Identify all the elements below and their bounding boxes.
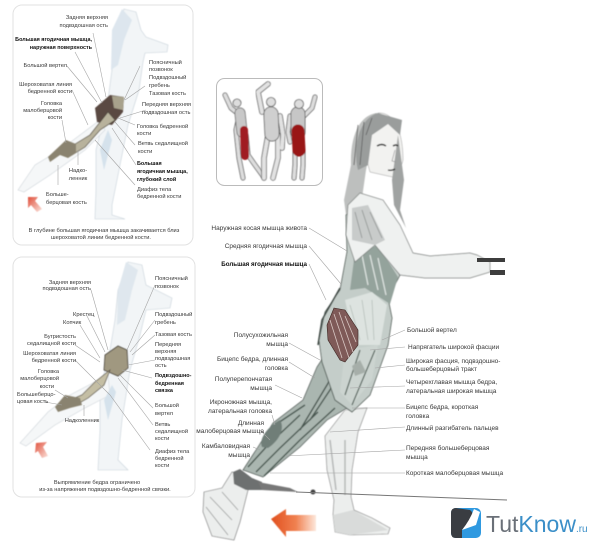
main figure bbox=[203, 113, 507, 540]
icon bbox=[451, 508, 481, 538]
cable bar handle bbox=[477, 258, 505, 275]
figure: left bbox=[225, 95, 263, 178]
torso and thigh bbox=[318, 200, 400, 412]
main figure labels: left: малоберцовая мышца bbox=[196, 427, 264, 435]
panel 2 labels: бедренная bbox=[155, 380, 184, 387]
panel 2 labels: цовая кость bbox=[17, 399, 48, 405]
panel 2 labels: ость bbox=[155, 363, 167, 369]
panel 2 labels: Бугристость bbox=[44, 334, 76, 340]
panel 2 labels: Головка bbox=[38, 369, 60, 375]
panel 2 labels: кости bbox=[40, 384, 54, 390]
panel 1 labels: Больше- bbox=[46, 192, 69, 198]
panel 2 labels: связка bbox=[155, 388, 174, 394]
main figure labels: left: Полуперепончатая bbox=[215, 376, 272, 383]
figure: centre bbox=[258, 84, 283, 178]
panel 2 labels: Передняя bbox=[155, 342, 181, 348]
panel 2 labels: подвздошная bbox=[155, 356, 190, 362]
panel 1 labels: наружная поверхность bbox=[30, 45, 93, 51]
main leader lines bbox=[253, 228, 405, 473]
panel 2 labels: Тазовая кость bbox=[155, 332, 192, 338]
panel 2 labels: кости bbox=[155, 463, 169, 469]
panel 2 labels: верхняя bbox=[155, 349, 176, 355]
panel 1 labels: позвонок bbox=[149, 67, 173, 73]
main figure labels: right: Передняя большеберцовая bbox=[406, 444, 490, 452]
red arrow bbox=[35, 442, 48, 458]
panel 1 labels: Задняя верхняя bbox=[66, 15, 108, 21]
panel 2 labels: Подвздошно- bbox=[155, 373, 192, 379]
panel 2 labels bbox=[17, 275, 192, 493]
arm and shoulder bbox=[346, 193, 490, 278]
panel 1 labels bbox=[15, 15, 191, 241]
main figure labels: right: Напрягатель широкой фасции bbox=[408, 343, 499, 351]
panel 1 labels: гребень bbox=[149, 83, 170, 89]
panel 1 labels: Подвздошный bbox=[149, 74, 186, 81]
panel 2 labels: седалищной кости bbox=[27, 340, 76, 347]
main figure labels: right: большеберцовый тракт bbox=[406, 365, 477, 373]
panel 1 labels: берцовая кость bbox=[46, 200, 87, 206]
main figure labels: left: мышца bbox=[228, 452, 250, 459]
main figure labels: left: Камбаловидная bbox=[202, 442, 250, 450]
panel 2 labels: гребень bbox=[155, 320, 176, 326]
panel 2 labels: бедренной bbox=[155, 455, 184, 462]
pelvis and femur bbox=[55, 346, 128, 412]
main figure labels: left: Длинная bbox=[238, 420, 264, 427]
main figure labels: right bbox=[406, 326, 504, 477]
panel 1 labels: Поясничный bbox=[149, 59, 182, 66]
panel 1 labels: ягодичная мышца, bbox=[137, 169, 188, 175]
panel 2 labels: Шероховатая линия bbox=[23, 351, 76, 357]
panel 1 labels: Диафиз тела bbox=[137, 187, 172, 193]
panel 1 labels: Ветвь седалищной bbox=[138, 140, 188, 147]
panel 2 labels: подвздошная ость bbox=[43, 286, 91, 292]
panel 2 labels: вертел bbox=[155, 411, 173, 417]
head bbox=[354, 113, 406, 228]
main figure labels: left bbox=[196, 225, 308, 459]
panel 1 labels: Передняя верхняя bbox=[142, 102, 191, 108]
panel: muscle thumbnail bbox=[216, 78, 322, 186]
main figure labels: right: Длинный разгибатель пальцев bbox=[406, 424, 499, 432]
main figure labels: left: мышца bbox=[266, 341, 288, 348]
panel 1 labels: бедренной кости bbox=[28, 88, 72, 95]
logo: TutKnow.ru: TutKnow.ru bbox=[486, 511, 588, 537]
main figure labels: left: Большая ягодичная мышца bbox=[221, 261, 308, 268]
main figure labels: left: Полусухожильная bbox=[234, 332, 288, 339]
panel 1 labels: подвздошная ость bbox=[60, 23, 108, 29]
panel 1 labels: ленник bbox=[69, 176, 88, 182]
panel 1 labels: шероховатой линии бедренной кости. bbox=[51, 234, 151, 241]
panel 2 labels: Копчик bbox=[63, 320, 82, 326]
panel 1 labels: Большой вертел bbox=[23, 62, 67, 69]
panel 2 labels: из-за напряжения подвздошно-бедренной связки. bbox=[39, 486, 171, 493]
main figure labels: right: латеральная широкая мышца bbox=[406, 388, 497, 395]
panel 2 labels: седалищной bbox=[155, 428, 188, 435]
panel 2 labels: Надколенник bbox=[65, 418, 100, 424]
panel 2 labels: Ветвь bbox=[155, 422, 170, 428]
panel 1 labels: Тазовая кость bbox=[149, 91, 186, 97]
panel 1 labels: Головка бедренной bbox=[137, 123, 188, 130]
panel 1 labels: Надко- bbox=[69, 168, 87, 174]
main figure labels: right: Большой вертел bbox=[407, 326, 457, 334]
standing body bbox=[20, 262, 172, 470]
panel 1 labels: малоберцовой bbox=[23, 107, 62, 114]
main figure labels: right: Короткая малоберцовая мышца bbox=[406, 469, 504, 477]
panel 2 labels: Поясничный bbox=[155, 275, 188, 282]
main figure labels: right: Четырехглавая мышца бедра, bbox=[406, 378, 497, 386]
panel: lower left bbox=[13, 257, 195, 497]
panel 1 labels: бедренной кости bbox=[137, 193, 181, 200]
main figure labels: left: латеральная головка bbox=[208, 408, 272, 415]
panel 1 labels: Головка bbox=[41, 101, 63, 107]
main figure labels: right: Бицепс бедра, короткая bbox=[406, 403, 479, 411]
panel 1 labels: Шероховатая линия bbox=[19, 82, 72, 88]
logo: TutKnow.ru bbox=[451, 508, 588, 538]
panel 2 labels: кости bbox=[155, 436, 169, 442]
panel 1 labels: В глубине большая ягодичная мышца закачивается близ bbox=[29, 228, 180, 234]
panel 2 labels: Подвздошный bbox=[155, 311, 192, 318]
red arrow bbox=[28, 197, 42, 212]
panel 1 labels: Большая bbox=[137, 161, 162, 167]
standing body bbox=[18, 9, 168, 219]
panel 2 labels: Диафиз тела bbox=[155, 449, 190, 455]
panel 2 labels: бедренной кости bbox=[32, 357, 76, 364]
panel 1 leader lines bbox=[58, 33, 146, 185]
panel 1 labels: кости bbox=[48, 115, 62, 121]
panel 2 labels: Задняя верхняя bbox=[49, 280, 91, 286]
panel 2 labels: Большеберцо- bbox=[17, 392, 56, 398]
main figure labels: right: мышца bbox=[406, 454, 428, 461]
panel 2 labels: позвонок bbox=[155, 284, 179, 290]
rear leg and foot bbox=[203, 355, 352, 540]
panel 1 labels: подвздошная ость bbox=[142, 110, 190, 116]
main figure labels: right: Широкая фасция, подвздошно- bbox=[406, 358, 500, 365]
gluteus maximus muscle bbox=[327, 308, 358, 362]
standing leg bbox=[325, 408, 390, 535]
panel 1 labels: глубокий слой bbox=[137, 176, 176, 183]
main figure labels: left: Наружная косая мышца живота bbox=[211, 225, 307, 232]
main figure labels: left: головка bbox=[265, 365, 288, 372]
main figure labels: right: головка bbox=[406, 413, 430, 420]
panel 2 labels: Выпрямление бедра ограничено bbox=[54, 480, 140, 486]
orange arrow bbox=[271, 509, 316, 537]
main figure labels: left: Бицепс бедра, длинная bbox=[217, 355, 288, 363]
cable bbox=[296, 492, 507, 500]
panel: top left bbox=[13, 5, 193, 245]
panel 1 labels: Большая ягодичная мышца, bbox=[15, 37, 92, 43]
main figure labels: left: Икроножная мышца, bbox=[210, 399, 272, 406]
main figure labels: left: мышца bbox=[250, 385, 272, 392]
hair back bbox=[344, 113, 377, 215]
panel 1 labels: кости bbox=[138, 149, 152, 155]
panel 2 labels: малоберцовой bbox=[20, 375, 59, 382]
main figure labels: left: Средняя ягодичная мышца bbox=[225, 243, 307, 250]
panel 2 labels: Большой bbox=[155, 402, 179, 409]
figure: right bbox=[288, 97, 315, 178]
panel 2 leader lines bbox=[45, 285, 155, 450]
pelvis and femur bbox=[48, 95, 124, 162]
panel 2 labels: Крестец bbox=[73, 312, 95, 318]
panel 1 labels: кости bbox=[137, 131, 151, 137]
